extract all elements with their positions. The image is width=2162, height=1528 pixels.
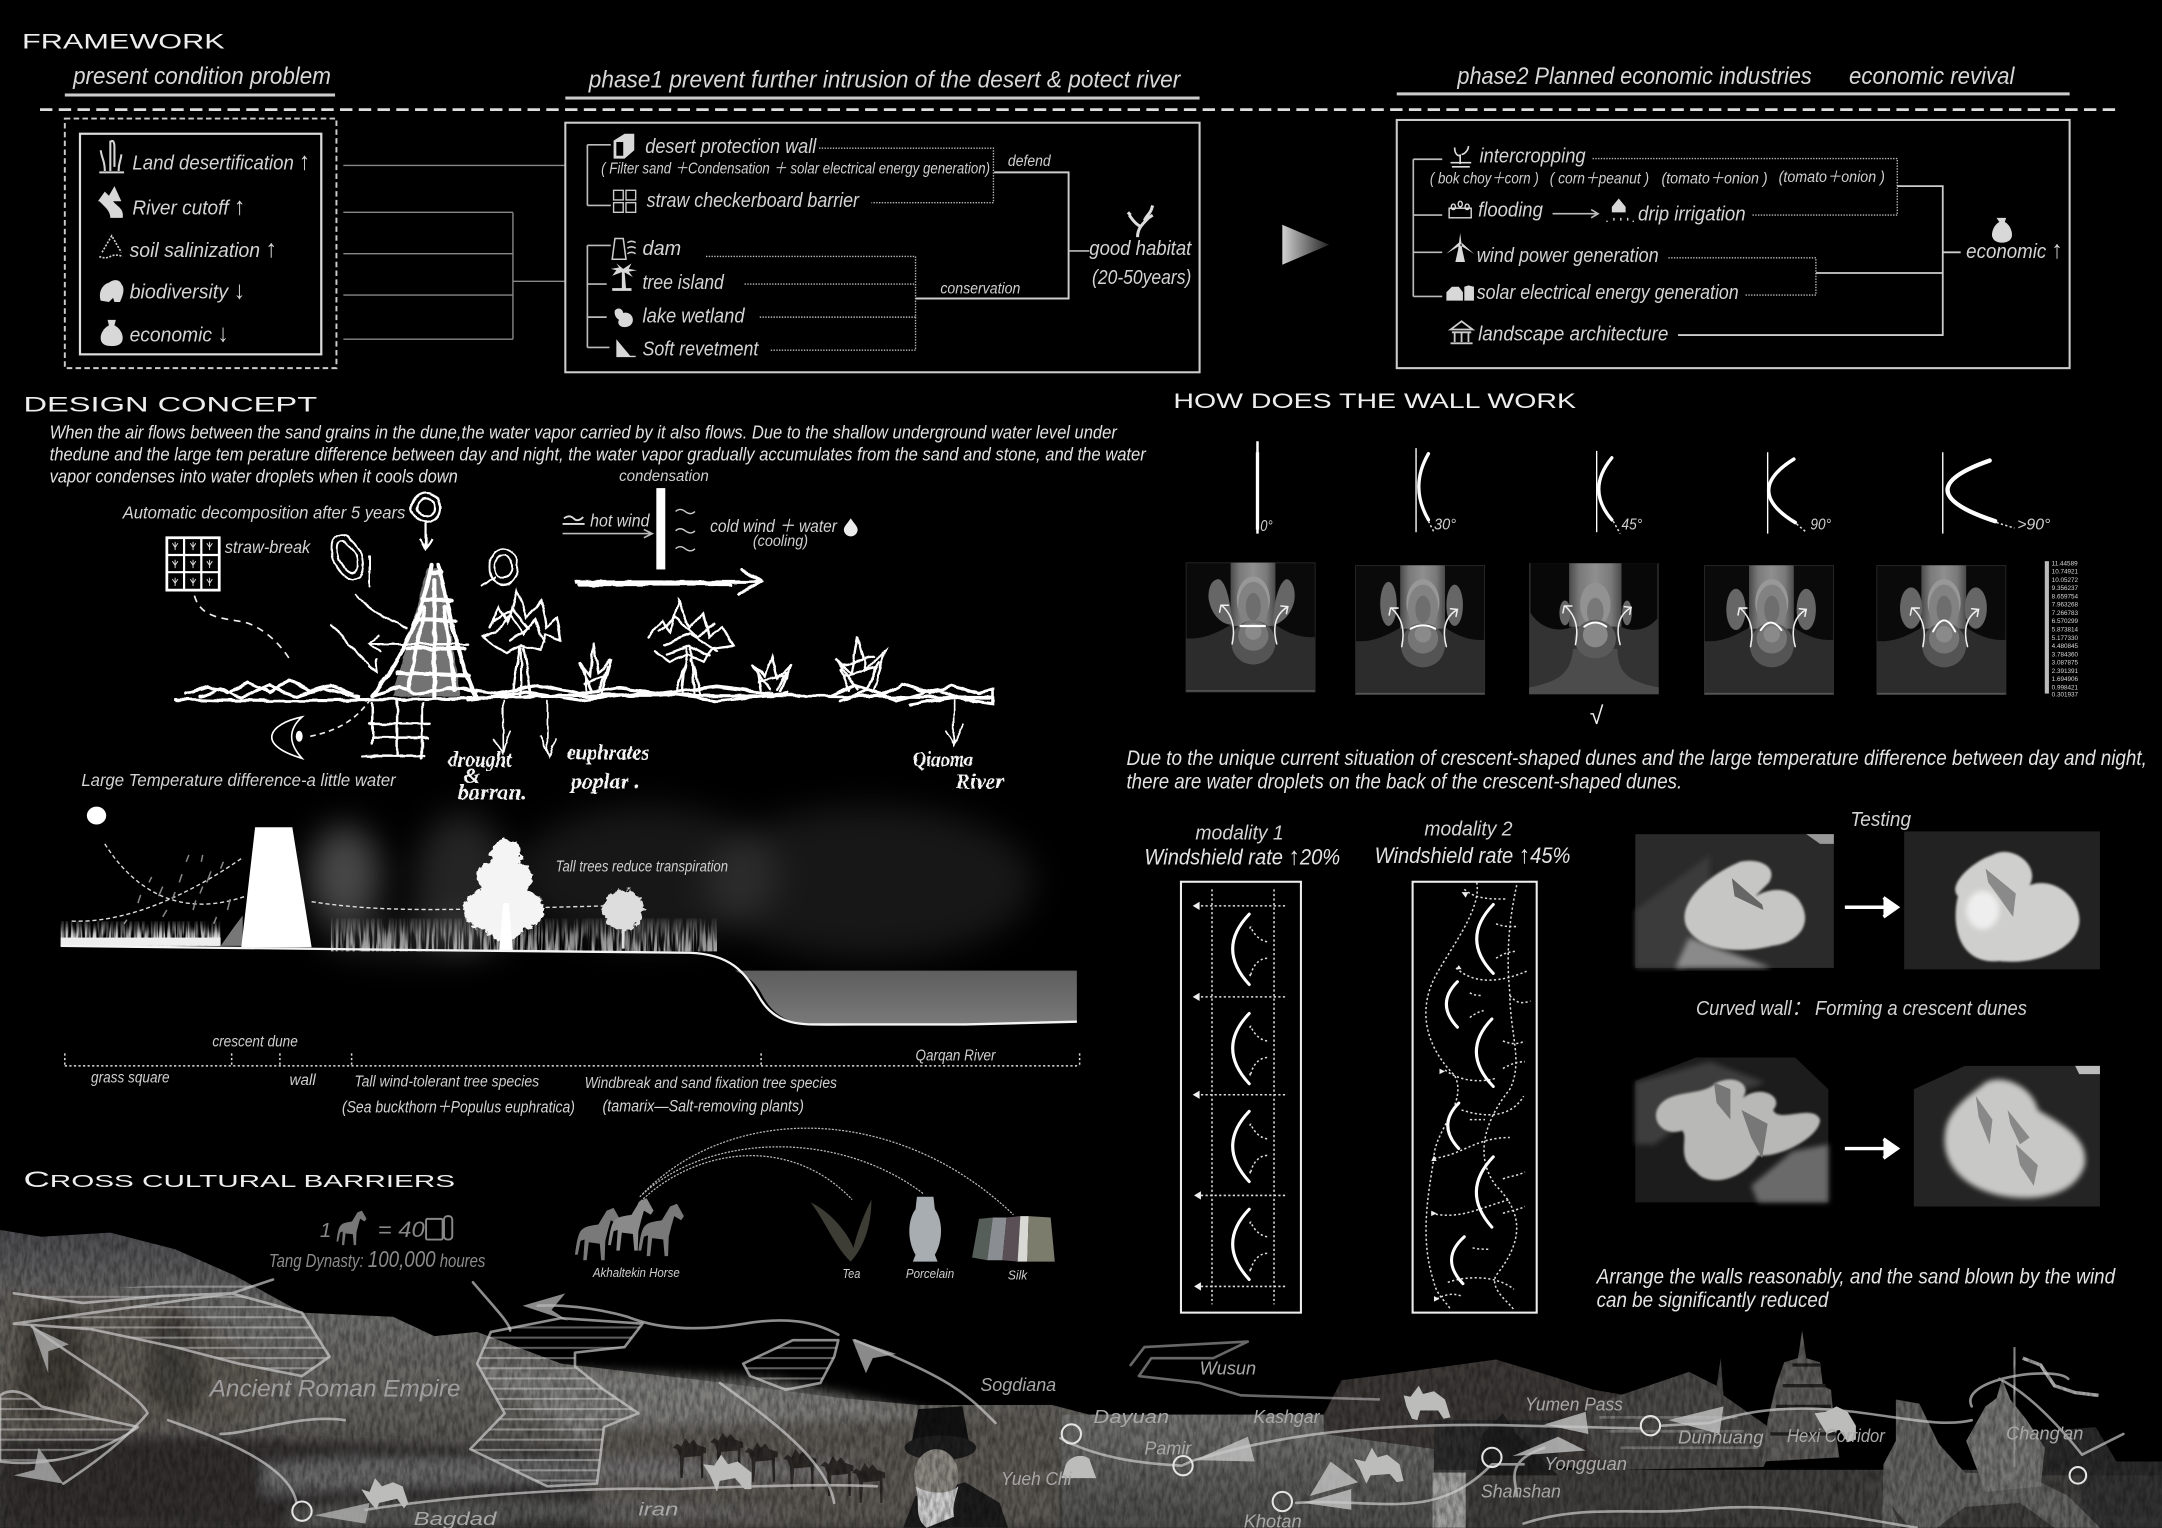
handwriting: euphrates poplar <box>567 740 649 794</box>
heading: phase 2: phase2 Planned economic industries <box>1457 63 1812 90</box>
handwriting: qiaomo river: Qiaomo <box>913 747 973 772</box>
label: tree island: tree island <box>643 271 725 294</box>
icon: palm <box>611 263 637 291</box>
exchange rate: horse to tea <box>320 1211 452 1245</box>
label: landscape architecture: landscape architecture <box>1478 323 1668 346</box>
text: tang dynasty: Tang Dynasty: 100,000 houres <box>269 1246 485 1272</box>
landscape: right mountain and monuments <box>1324 1331 2162 1528</box>
label: testing: Testing <box>1850 808 1911 831</box>
label: modality 1 <box>1144 822 1340 871</box>
legend: colour scale: 4.480845 <box>2052 643 2079 650</box>
handwriting: drought and barren: barran. <box>458 780 527 805</box>
scale line <box>65 1053 1080 1066</box>
label: conservation: conservation <box>940 281 1021 298</box>
heading: phase 1: phase1 prevent further intrusion of the desert & potect river <box>588 67 1181 94</box>
map labels: Chang'an <box>2006 1422 2083 1443</box>
panel: phase 2 <box>1397 120 2070 368</box>
panel: framework <box>22 29 2121 372</box>
diagram: condensation wall <box>563 468 858 569</box>
scale labels: (tamarix—Salt-removing plants) <box>603 1096 804 1115</box>
scale labels: grass square <box>91 1069 170 1086</box>
sketch: dune wall and vegetation <box>175 493 993 758</box>
river <box>735 971 1077 1026</box>
legend: colour scale: 10.74921 <box>2052 569 2079 576</box>
legend: colour scale: 0.998421 <box>2052 684 2079 691</box>
scale labels: Qarqan River <box>916 1047 996 1064</box>
exchange rate: horse to tea: 1 <box>320 1219 331 1242</box>
crop pairs: ( bok choy＋corn ) <box>1430 170 1539 187</box>
label: soft revetment: Soft revetment <box>643 338 759 361</box>
icon: lake <box>615 308 633 327</box>
trade arcs <box>638 1128 1013 1215</box>
handwriting: drought and barren: drought <box>448 747 512 772</box>
label: river cutoff: River cutoff ↑ <box>132 193 245 220</box>
icon: money bag <box>101 320 123 346</box>
diagram: modality 1 layout <box>1181 882 1301 1313</box>
landscape: grain overlay <box>0 1227 2162 1528</box>
diagram: wall curvature 45 degrees <box>1597 451 1642 534</box>
map: balkhash <box>1131 1342 1379 1399</box>
icon: money bag <box>1992 218 2012 243</box>
icon: river <box>98 186 123 218</box>
text: design concept description <box>50 422 1147 487</box>
diagram: condensation wall: hot wind <box>590 511 650 531</box>
legend: colour scale: 2.391391 <box>2052 668 2079 675</box>
map labels: Sogdiana <box>980 1374 1056 1395</box>
label: modality 1: Windshield rate ↑20% <box>1144 844 1340 871</box>
crop pairs: (tomato＋onion ) <box>1779 169 1885 186</box>
label: modality 2: Windshield rate ↑45% <box>1375 842 1570 869</box>
connector lines <box>343 165 565 339</box>
sketch: big arrow <box>576 569 761 594</box>
label: dam: dam <box>643 237 681 260</box>
sun <box>87 807 106 825</box>
heading: phase 2 <box>1397 63 2070 95</box>
diagram: wall curvature 30 degrees: 30° <box>1434 516 1456 533</box>
tall tree <box>463 840 545 951</box>
figure: mounted statue <box>1882 1347 2100 1528</box>
heading: framework: FRAMEWORK <box>22 29 225 53</box>
map labels: Wusun <box>1200 1358 1256 1379</box>
icon: building <box>1451 321 1473 343</box>
legend: colour scale: 10.05272 <box>2052 577 2079 584</box>
heading: present condition problem: present condition problem <box>72 63 331 90</box>
label: biodiversity: biodiversity ↓ <box>130 278 245 305</box>
scale labels: wall <box>290 1072 316 1089</box>
label: automatic decomposition: Automatic decomposition after 5 years <box>122 502 405 522</box>
map labels: Kashgar <box>1253 1406 1320 1427</box>
legend: colour scale: 9.356237 <box>2052 585 2079 592</box>
text: design concept description: When the air flows between the sand grains in the dune,the water vapor carried by it also flows. Due to the shallow underground water level under <box>50 422 1118 442</box>
text: design concept description: vapor condenses into water droplets when it cools down <box>50 467 458 487</box>
label: tea: Tea <box>842 1266 860 1281</box>
label: wind power generation: wind power generation <box>1477 244 1659 267</box>
sand particles <box>124 855 230 924</box>
sketch: ground <box>175 681 993 705</box>
legend: colour scale: 8.659754 <box>2052 593 2079 600</box>
icon: pale camels <box>361 1386 1856 1510</box>
heading: how does the wall work: HOW DOES THE WALL WORK <box>1173 389 1576 413</box>
label: land desertification: Land desertification ↑ <box>132 149 310 176</box>
map: routes <box>32 1282 996 1510</box>
scale labels <box>91 1034 996 1117</box>
icon: dam <box>612 239 636 259</box>
diagram: wall curvature over 90 degrees: >90° <box>2017 516 2050 533</box>
label: soil salinization: soil salinization ↑ <box>130 236 277 263</box>
cfd simulation: 45 degrees selected <box>1529 563 1659 694</box>
icon: sprout <box>1451 146 1471 167</box>
map: mediterranean <box>0 1391 138 1463</box>
icon: flood <box>1449 201 1471 218</box>
scale labels: (Sea buckthorn＋Populus euphratica) <box>342 1098 575 1117</box>
icon: silk swatches <box>972 1216 1055 1262</box>
figure: old man <box>903 1406 1008 1528</box>
map labels: Dayuan <box>1093 1406 1169 1427</box>
arrow: phase 1 to phase 2 <box>1282 225 1329 265</box>
diagram: wall curvature over 90 degrees <box>1943 452 2050 534</box>
map: arrowheads <box>14 1293 896 1524</box>
sketch: trees <box>483 590 885 696</box>
icon: revetment <box>616 339 636 357</box>
note: filter sand: ( Filter sand ＋Condensation ＋ solar electrical energy generation) <box>601 161 990 178</box>
map: europe <box>14 1280 330 1376</box>
icon: crescent <box>272 700 370 758</box>
label: lake wetland: lake wetland <box>643 305 746 328</box>
sketch: sun <box>412 493 441 549</box>
diagram: condensation wall: (cooling) <box>753 533 808 550</box>
sketch: tower <box>372 565 476 696</box>
label: desert protection wall: desert protection wall <box>645 135 817 158</box>
arrow: flooding to drip <box>1553 210 1598 218</box>
label: years: (20-50years) <box>1092 266 1191 289</box>
diagram: modality 2 layout <box>1413 882 1537 1313</box>
label: silk: Silk <box>1008 1268 1029 1283</box>
wind trajectories <box>72 844 607 921</box>
label: economic up: economic ↑ <box>1966 237 2063 264</box>
ground line <box>61 946 1077 1024</box>
label: porcelain: Porcelain <box>906 1266 954 1281</box>
map labels: Yumen Pass <box>1525 1394 1623 1415</box>
diagram: wall curvature 0 degrees <box>1257 441 1273 535</box>
grass <box>61 921 221 946</box>
legend: colour scale: 7.266783 <box>2052 610 2079 617</box>
handwriting: drought and barren <box>448 747 527 805</box>
check mark: best option: √ <box>1590 703 1604 730</box>
icon: cactus <box>99 141 124 172</box>
label: akhaltekin horse: Akhaltekin Horse <box>592 1265 680 1280</box>
label: modality 1: modality 1 <box>1195 822 1284 845</box>
map: eastern routes <box>1060 1373 2123 1528</box>
panel: design concept <box>23 393 1147 1117</box>
label: curved wall: Curved wall： Forming a crescent dunes <box>1696 997 2027 1020</box>
map labels: Yueh Chi <box>1001 1468 1072 1489</box>
legend: colour scale: 3.087875 <box>2052 660 2079 667</box>
label: straw checkerboard barrier: straw checkerboard barrier <box>647 189 860 212</box>
text: arrange the walls: Arrange the walls reasonably, and the sand blown by the wind <box>1595 1266 2116 1289</box>
label: drip irrigation: drip irrigation <box>1638 203 1746 226</box>
text: crescent-shaped dunes: there are water droplets on the back of the crescent-shaped dunes. <box>1127 771 1682 794</box>
legend: colour scale: 3.784360 <box>2052 651 2079 658</box>
arrow: test 2 <box>1845 1139 1897 1158</box>
label: tall trees: Tall trees reduce transpiration <box>556 858 728 875</box>
text: arrange the walls <box>1595 1266 2116 1312</box>
camel caravan <box>673 1433 885 1503</box>
map: eastern arrows <box>1194 1406 1724 1510</box>
photo: test 1 before <box>1635 834 1834 968</box>
heading: design concept: DESIGN CONCEPT <box>23 393 317 417</box>
cfd simulation: over 90 degrees <box>1877 565 2006 695</box>
pagoda <box>1762 1331 1839 1462</box>
icon: animal <box>100 280 123 302</box>
legend: colour scale: 0.301937 <box>2052 691 2079 698</box>
handwriting: drought and barren: & <box>463 763 480 788</box>
label: solar electrical energy generation: solar electrical energy generation <box>1477 281 1739 304</box>
icon: porcelain vase <box>909 1197 941 1262</box>
map: caspian <box>470 1318 643 1486</box>
icon: wind turbine <box>1446 233 1474 262</box>
landscape background <box>0 1227 2162 1528</box>
map labels: iran <box>638 1498 678 1519</box>
label: good habitat: good habitat <box>1089 237 1192 260</box>
small tree <box>603 889 644 949</box>
label: large temperature difference: Large Temperature difference-a little water <box>81 770 397 790</box>
map labels: Dunhuang <box>1678 1427 1764 1448</box>
heading: cross cultural barriers: C ROSS CULTURAL BARRIERS <box>23 1167 455 1192</box>
panel: how does the wall work <box>1127 389 2147 1313</box>
icon: wall block <box>614 134 634 159</box>
panel: phase 1 <box>565 123 1200 372</box>
map labels <box>208 1358 2083 1528</box>
pavilion <box>1587 1358 1779 1470</box>
dune <box>221 916 243 946</box>
photo: test 2 after <box>1914 1066 2100 1206</box>
legend: colour scale: 7.963268 <box>2052 602 2079 609</box>
arrow: test 1 <box>1845 898 1897 917</box>
photo: test 1 after <box>1904 831 2100 969</box>
icon: tea leaves <box>811 1200 871 1262</box>
chart: section diagram <box>61 807 1080 1117</box>
handwriting: euphrates poplar: poplar . <box>569 769 640 794</box>
handwriting: qiaomo river <box>913 747 1004 794</box>
photo: test 2 before <box>1635 1058 1828 1202</box>
diagram: wall curvature 0 degrees: 0° <box>1260 518 1273 535</box>
text: arrange the walls: can be significantly reduced <box>1597 1289 1829 1312</box>
label: intercropping: intercropping <box>1479 145 1586 168</box>
sketch: roots <box>361 700 430 758</box>
map labels: Pamir <box>1144 1438 1192 1459</box>
crop pairs: ( corn＋peanut ) <box>1550 170 1649 187</box>
scale labels: crescent dune <box>212 1034 298 1051</box>
diagram: wall curvature 90 degrees <box>1768 452 1831 534</box>
map labels: Shanshan <box>1481 1480 1561 1501</box>
label: modality 2 <box>1375 818 1570 869</box>
crop pairs: (tomato＋onion ) <box>1661 170 1768 187</box>
cfd simulation: 90 degrees <box>1704 565 1834 695</box>
legend: colour scale <box>2045 560 2079 698</box>
icon: tree branch <box>1128 205 1153 237</box>
exchange rate: horse to tea: = 40 <box>378 1217 425 1242</box>
diagram: condensation wall: cold wind ＋ water <box>710 516 838 536</box>
map: city nodes <box>292 1416 2086 1521</box>
text: design concept description: thedune and the large tem perature difference between day and night, the water vapor gradually accumulates from the sand and stone, and the water <box>50 445 1147 465</box>
icon: straw checkerboard <box>614 190 636 212</box>
legend: colour scale: 1.694906 <box>2052 676 2079 683</box>
icon: straw grid <box>167 538 219 590</box>
label: defend: defend <box>1008 153 1052 170</box>
diagram: wall curvature 45 degrees: 45° <box>1621 516 1642 533</box>
icon: drip <box>1606 199 1634 222</box>
icon: akhaltekin horses <box>575 1198 684 1260</box>
wall section <box>241 827 312 947</box>
landscape: mountains and plain <box>0 1230 1434 1528</box>
icon: salinization <box>99 236 123 258</box>
map labels: Yongguan <box>1544 1453 1627 1474</box>
handwriting: euphrates poplar: euphrates <box>567 740 649 765</box>
cfd simulation: 30 degrees <box>1355 565 1485 695</box>
map: aral <box>743 1340 838 1390</box>
legend: colour scale: 5.177330 <box>2052 635 2079 642</box>
label: flooding: flooding <box>1478 198 1543 221</box>
haze <box>309 807 1034 958</box>
legend: colour scale: 11.44589 <box>2052 560 2078 567</box>
legend: colour scale: 6.570299 <box>2052 618 2079 625</box>
map labels: Ancient Roman Empire <box>208 1376 461 1403</box>
diagram: wall curvature 30 degrees <box>1416 448 1456 533</box>
cfd simulation: 0 degrees <box>1186 563 1315 692</box>
label: modality 2: modality 2 <box>1424 818 1513 841</box>
label: economic: economic ↓ <box>130 320 229 347</box>
panel: cross cultural barriers <box>0 1128 2162 1528</box>
diagram: condensation wall: condensation <box>619 468 709 485</box>
map labels: Hexi Corridor <box>1787 1425 1886 1446</box>
heading: phase 2: economic revival <box>1849 63 2015 90</box>
legend: colour scale: 5.873814 <box>2052 626 2079 633</box>
scale labels: Windbreak and sand fixation tree species <box>585 1075 837 1092</box>
sketch: down arrows <box>494 700 962 756</box>
map: silk road lines <box>0 1280 2123 1528</box>
label: straw-break: straw-break <box>225 537 311 557</box>
panel: present condition problem <box>65 119 336 368</box>
sketch: rings and arrows <box>325 530 517 671</box>
text: crescent-shaped dunes <box>1127 747 2147 794</box>
icon: solar <box>1446 285 1474 301</box>
scale labels: Tall wind-tolerant tree species <box>354 1074 539 1091</box>
handwriting: qiaomo river: River <box>955 769 1004 794</box>
crop pairs <box>1430 169 1885 187</box>
diagram: wall curvature 90 degrees: 90° <box>1810 516 1831 533</box>
